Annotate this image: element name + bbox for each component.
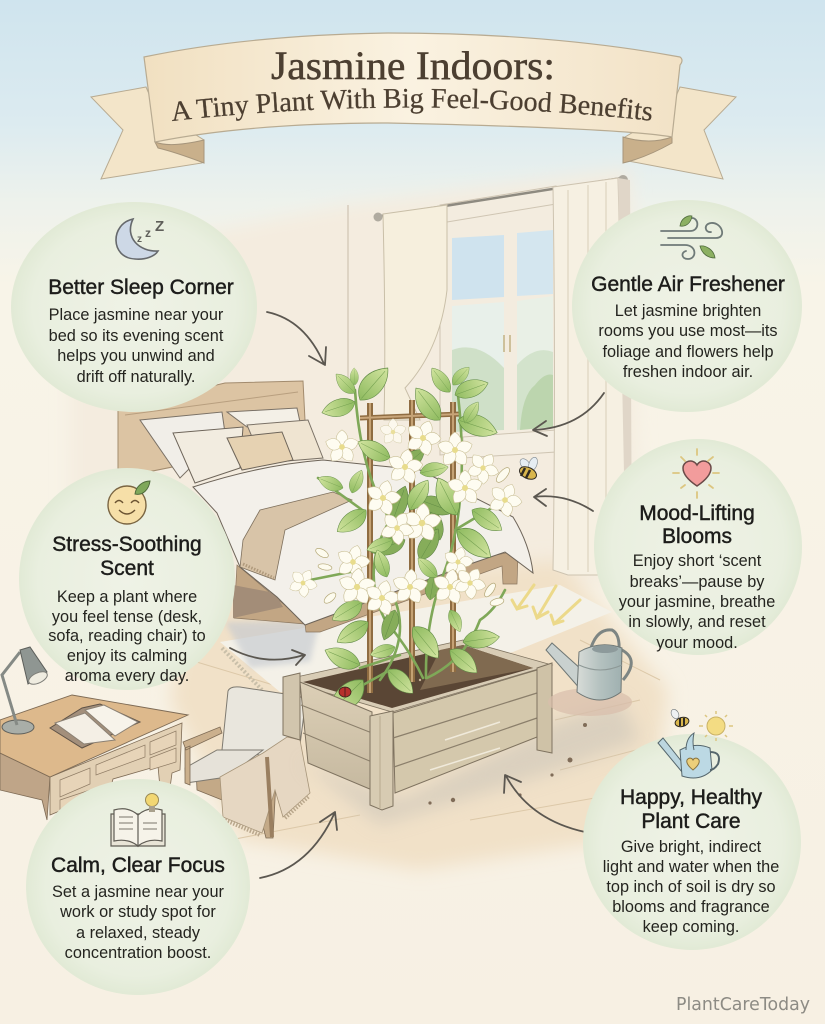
- wooden planter back edge and soil: [283, 640, 552, 712]
- arrow: stress to rug: [230, 648, 305, 665]
- throw blanket: [220, 737, 310, 833]
- body text: in slowly, and reset: [628, 613, 766, 631]
- floor: [170, 560, 668, 870]
- light leaves: [352, 361, 395, 406]
- wooden planter: [283, 663, 552, 810]
- open book on desk: [50, 704, 140, 748]
- arrow: care to planter: [504, 775, 585, 832]
- body text: foliage and flowers help: [602, 343, 774, 361]
- duvet: [193, 460, 533, 625]
- sunbeam arrows: [512, 585, 580, 624]
- right fold: [623, 137, 672, 163]
- body text: Give bright, indirect: [621, 838, 762, 856]
- body text: drift off naturally.: [77, 368, 195, 386]
- main ribbon: [144, 33, 682, 142]
- armchair: [183, 687, 310, 838]
- body text: light and water when the: [603, 858, 779, 876]
- body text: breaks’—pause by: [630, 573, 765, 591]
- desk: [0, 695, 188, 820]
- pillows: [227, 408, 300, 427]
- body text: Set a jasmine near your: [52, 883, 225, 901]
- logo: PlantCareToday: PlantCareToday: [676, 994, 810, 1015]
- body text: helps you unwind and: [57, 347, 215, 365]
- body text: concentration boost.: [65, 944, 211, 962]
- panel: happy, healthy plant care: Plant Care: [641, 810, 741, 833]
- subtitle line: A Tiny Plant With Big Feel-Good Benefits: [172, 88, 652, 122]
- icon: glowing heart: [673, 449, 719, 498]
- ladybug on leaf: [339, 687, 351, 697]
- body text: a relaxed, steady: [76, 924, 201, 942]
- buds: [314, 466, 512, 607]
- arrow: air to window: [533, 393, 604, 436]
- heading: Calm, Clear Focus: [51, 854, 225, 877]
- body text: sofa, reading chair) to: [48, 627, 206, 645]
- bed base and legs: [234, 552, 518, 632]
- body text: aroma every day.: [65, 667, 189, 685]
- headboard: [118, 381, 306, 478]
- icon: moon with zzz: Z: [155, 218, 164, 235]
- body text: work or study spot for: [59, 903, 216, 921]
- subtitle curve: [172, 108, 654, 121]
- body text: bed so its evening scent: [49, 327, 224, 345]
- right curtain: [553, 178, 628, 575]
- room illustration: [0, 170, 668, 870]
- body text: rooms you use most—its: [598, 322, 778, 340]
- desk lamp: [2, 647, 49, 734]
- body text: you feel tense (desk,: [52, 608, 202, 626]
- arrow: focus to planter: [260, 812, 337, 878]
- arrow: mood to plant: [534, 489, 593, 511]
- body text: freshen indoor air.: [623, 363, 753, 381]
- body text: top inch of soil is dry so: [606, 878, 776, 896]
- panel: stress-soothing scent: [19, 468, 235, 690]
- heading: Gentle Air Freshener: [591, 273, 785, 296]
- window: [440, 186, 556, 458]
- watering can on floor: [546, 630, 632, 716]
- heading: Better Sleep Corner: [48, 276, 234, 299]
- arrow: sleep to plant: [267, 312, 326, 365]
- body text: enjoy its calming: [67, 647, 187, 665]
- stems: [310, 390, 505, 695]
- title line: Jasmine Indoors:: [271, 43, 555, 88]
- wall tone: [70, 170, 640, 640]
- body text: Keep a plant where: [57, 588, 197, 606]
- plant: stakes and trellis: [360, 400, 461, 693]
- flowers: [379, 418, 407, 446]
- icon: blue watering can, bee and sun: [658, 708, 733, 778]
- heading: Mood-Lifting: [639, 502, 755, 525]
- body text: your jasmine, breathe: [619, 593, 775, 611]
- left ribbon tail: [91, 87, 204, 179]
- icon: moon with zzz: z: [137, 234, 142, 245]
- floor shadow under planter: [300, 700, 640, 825]
- body text: your mood.: [656, 634, 738, 652]
- panel: gentle air freshener: [572, 200, 802, 412]
- body text: blooms and fragrance: [612, 898, 770, 916]
- body text: Enjoy short ‘scent: [633, 552, 762, 570]
- jasmine plant: stems, leaves, flowers: [283, 361, 529, 722]
- panel: stress-soothing scent: Scent: [100, 557, 154, 580]
- panel: mood-lifting blooms: [594, 439, 802, 655]
- panel: mood-lifting blooms: Blooms: [662, 525, 732, 548]
- heading: Stress-Soothing: [52, 533, 202, 556]
- body text: Place jasmine near your: [49, 306, 224, 324]
- bed: [118, 381, 533, 632]
- banner: [90, 32, 737, 180]
- panel: better sleep corner: [11, 202, 257, 412]
- wall corner line: [347, 205, 349, 390]
- icon: moon with zzz: z: [145, 226, 151, 240]
- heading: Happy, Healthy: [620, 786, 763, 809]
- icon: open book and bulb: [111, 794, 165, 846]
- right ribbon tail: [623, 87, 736, 179]
- icon: wind and leaves: [661, 216, 722, 259]
- rug: [220, 585, 612, 692]
- icon: smile with leaf: [108, 481, 150, 524]
- panel: happy, healthy plant care: [583, 708, 801, 950]
- icon: moon with zzz: [116, 218, 164, 259]
- bee near plant: [518, 456, 539, 482]
- body text: keep coming.: [643, 918, 739, 936]
- panel: calm, clear focus: [26, 779, 250, 995]
- curtain rod: [375, 178, 622, 217]
- left fold: [155, 140, 204, 163]
- left curtain: [383, 205, 447, 420]
- small soil scatter: [428, 723, 587, 805]
- body text: Let jasmine brighten: [615, 302, 761, 320]
- beige throw: [240, 492, 352, 580]
- floor planks: [190, 640, 660, 840]
- darker leaves behind flowers: [385, 483, 413, 523]
